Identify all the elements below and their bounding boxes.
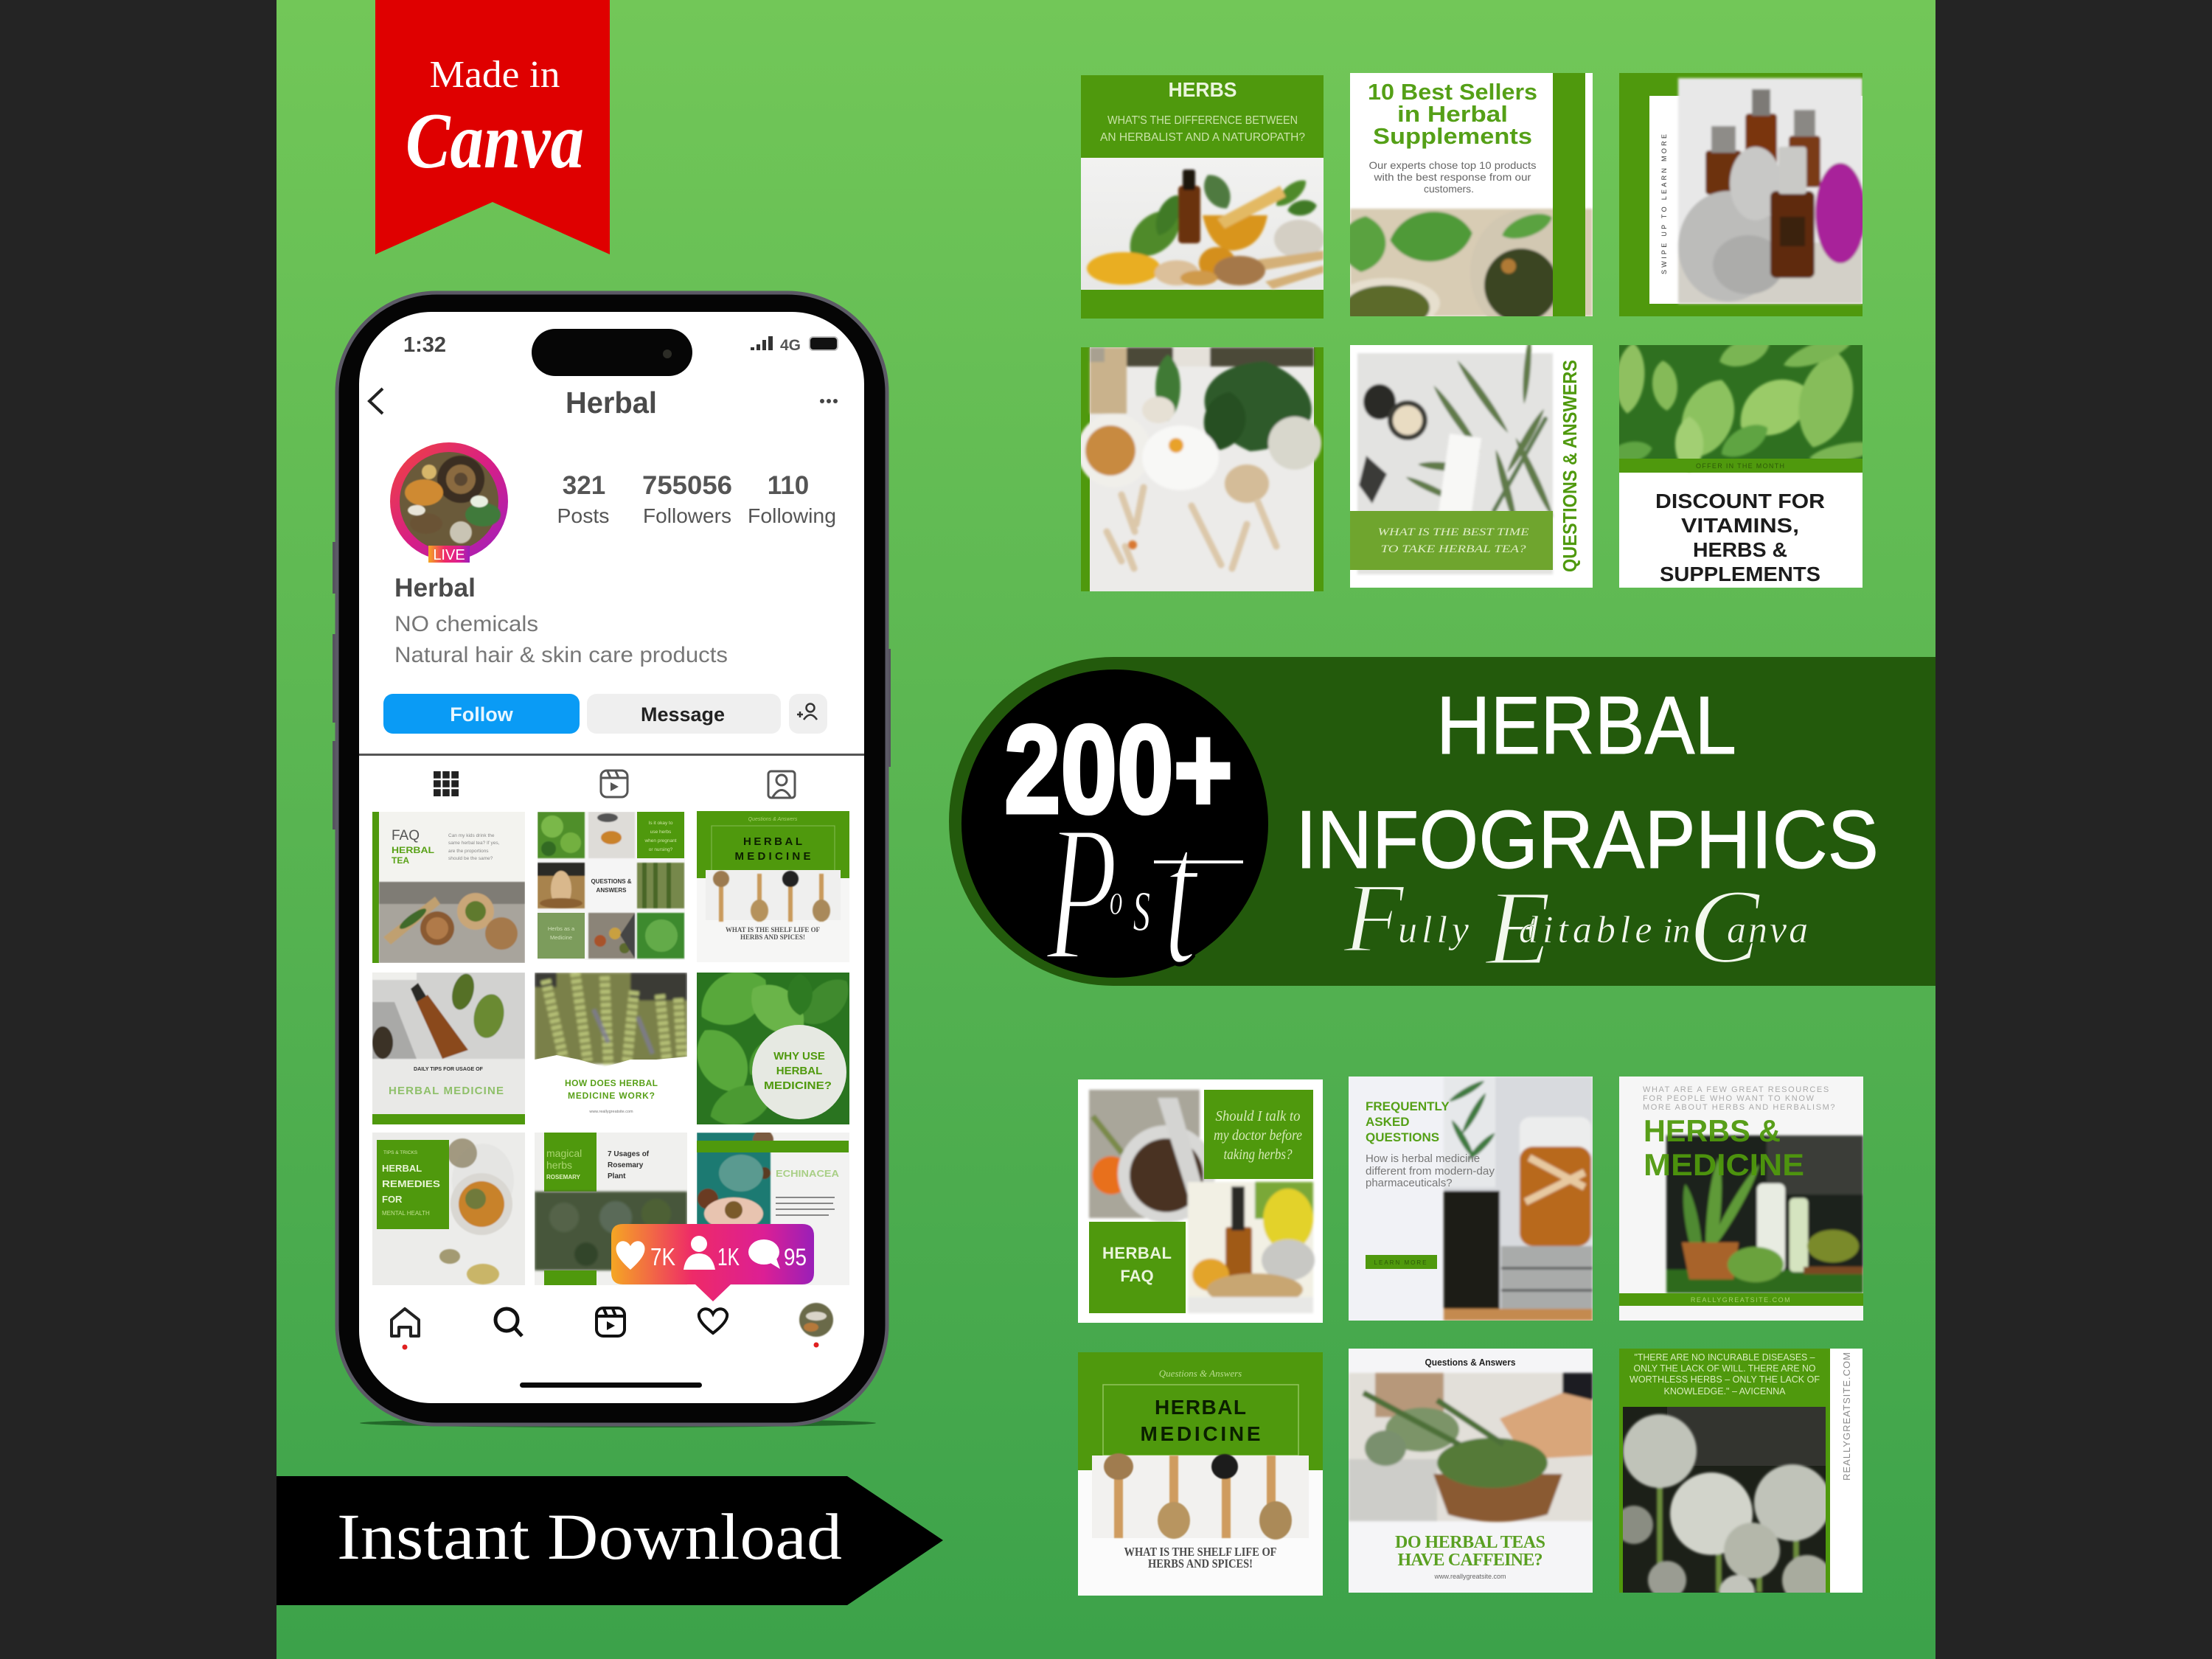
- tile: discount: OFFER IN THE MONTH: [1696, 462, 1784, 470]
- tile: frequently asked questions: ASKED: [1366, 1115, 1410, 1129]
- badge circle: [961, 669, 1268, 978]
- profile header: [369, 386, 838, 420]
- heading: HERBAL: [1436, 680, 1736, 771]
- tile: herbal teas caffeine: [1349, 1349, 1593, 1593]
- script subtitle: E: [1484, 869, 1551, 987]
- tile: 10 best sellers: with the best response from our: [1373, 171, 1531, 183]
- tile: frequently asked questions: LEARN MORE: [1374, 1259, 1427, 1266]
- tile: frequently asked questions: QUESTIONS: [1366, 1130, 1439, 1144]
- grid post: why use herbal medicine: MEDICINE?: [764, 1079, 832, 1092]
- tile: questions and answers: WHAT IS THE BEST TIME: [1377, 526, 1529, 538]
- grid post: rosemary: Rosemary: [608, 1161, 644, 1169]
- grid post: herbal remedies: [372, 1133, 525, 1285]
- tile: herbal faq: taking herbs?: [1224, 1147, 1292, 1163]
- tile: herbal faq: HERBAL: [1102, 1244, 1172, 1262]
- profile tab icons: [434, 771, 795, 798]
- ribbon: made in canva: Canva: [406, 97, 584, 185]
- tile: discount: VITAMINS,: [1681, 514, 1799, 537]
- profile stats: Posts: [557, 504, 609, 527]
- profile buttons: Follow: [450, 703, 514, 726]
- tile: frequently asked questions: pharmaceuticals?: [1366, 1177, 1453, 1189]
- tile: herbs and medicine: MEDICINE: [1644, 1147, 1804, 1182]
- grid post: rosemary: Plant: [608, 1172, 626, 1180]
- tile: 10 best sellers: [1350, 73, 1593, 316]
- tile: herbal faq: my doctor before: [1214, 1127, 1302, 1144]
- icon: reels: [597, 1308, 625, 1336]
- notification badge: 95: [784, 1244, 807, 1270]
- tile: frequently asked questions: How is herbal medicine: [1366, 1152, 1480, 1165]
- profile stats: [557, 471, 836, 527]
- tile: herbal medicine spoons: HERBAL: [1155, 1396, 1246, 1419]
- instant download arrow: [276, 1476, 943, 1605]
- grid post: how does herbal medicine work: www.reallygreatsite.com: [588, 1110, 633, 1114]
- grid post: herbal medicine spoons: WHAT IS THE SHELF LIFE OF: [726, 927, 820, 934]
- tile: herbal faq: [1078, 1079, 1323, 1323]
- tile: herbs and medicine: REALLYGREATSITE.COM: [1691, 1296, 1791, 1304]
- grid post: FAQ herbal tea: Can my kids drink the: [448, 833, 495, 838]
- tile: essential oil bottles: [1619, 73, 1863, 316]
- profile bio: Natural hair & skin care products: [394, 643, 728, 667]
- grid post: questions and answers collage: Herbs as a: [548, 925, 575, 932]
- profile stats: 110: [768, 471, 809, 500]
- grid post: questions and answers collage: QUESTIONS &: [591, 878, 632, 885]
- tile: herbs and medicine: WHAT ARE A FEW GREAT RESOURCES: [1643, 1085, 1830, 1094]
- tile: herbal medicine spoons: [1078, 1352, 1323, 1596]
- grid post: herbal medicine tips: HERBAL MEDICINE: [389, 1085, 504, 1097]
- tile: discount: SUPPLEMENTS: [1660, 563, 1820, 585]
- notification badge: 7K: [650, 1243, 675, 1270]
- tile: herbal medicine spoons: HERBS AND SPICES!: [1148, 1557, 1253, 1571]
- grid post: herbal medicine spoons: Questions & Answers: [748, 817, 798, 822]
- grid post: herbal medicine tips: DAILY TIPS FOR USAGE OF: [414, 1067, 484, 1072]
- tile: avicenna quote: KNOWLEDGE." – AVICENNA: [1663, 1385, 1786, 1397]
- grid post: rosemary: [535, 1133, 687, 1285]
- post script: [1046, 785, 1243, 1006]
- grid post: FAQ herbal tea: same herbal tea? If yes,: [448, 841, 500, 846]
- icon: home: [392, 1309, 419, 1336]
- profile bio: NO chemicals: [394, 612, 538, 636]
- phone body: [337, 293, 887, 1425]
- status bar: 4G: [780, 337, 801, 354]
- grid post: FAQ herbal tea: [372, 812, 525, 963]
- grid post: questions and answers collage: use herbs: [650, 830, 672, 835]
- tile: herbal faq: FAQ: [1120, 1267, 1154, 1285]
- grid post: FAQ herbal tea: should be the same?: [448, 856, 493, 861]
- tile: 10 best sellers: in Herbal: [1397, 101, 1508, 127]
- tile: herbal teas caffeine: Questions & Answers: [1425, 1357, 1516, 1368]
- grid post: questions and answers collage: Is it okay to: [649, 821, 673, 826]
- profile avatar: LIVE: [433, 547, 465, 563]
- grid post: herbal remedies: FOR: [382, 1194, 403, 1205]
- tile: herbal medicine spoons: MEDICINE: [1140, 1422, 1261, 1445]
- tile: herbs naturopath: WHAT'S THE DIFFERENCE BETWEEN: [1107, 114, 1298, 127]
- script subtitle: in: [1663, 911, 1690, 950]
- tile: herbs and medicine: MORE ABOUT HERBS AND HERBALISM?: [1643, 1103, 1836, 1112]
- grid post: why use herbal medicine: HERBAL: [776, 1065, 822, 1077]
- grid post: herbal medicine spoons: [697, 811, 849, 962]
- tile: discount: [1619, 345, 1863, 588]
- grid post: FAQ herbal tea: TEA: [392, 855, 409, 866]
- grid post: FAQ herbal tea: FAQ: [392, 828, 420, 844]
- tile: frequently asked questions: [1349, 1077, 1593, 1321]
- profile bio: [394, 574, 728, 667]
- post script: P: [1046, 785, 1118, 1001]
- tile: herbs and medicine: FOR PEOPLE WHO WANT TO KNOW: [1643, 1094, 1815, 1103]
- phone screen: [359, 312, 864, 1403]
- tile: questions and answers: QUESTIONS & ANSWERS: [1559, 360, 1581, 572]
- grid post: herbal medicine spoons: MEDICINE: [734, 850, 811, 863]
- grid post: herbal medicine spoons: HERBS AND SPICES!: [740, 934, 805, 942]
- banner: 200+ post herbal infographics: [949, 657, 1935, 1006]
- grid post: herbal remedies: REMEDIES: [382, 1178, 440, 1189]
- tile: 10 best sellers: Our experts chose top 10 products: [1368, 159, 1537, 171]
- tile: herbs and medicine: [1619, 1077, 1863, 1321]
- profile buttons: Message: [641, 703, 725, 726]
- tile: herbs naturopath: AN HERBALIST AND A NATUROPATH?: [1100, 131, 1305, 144]
- grid post: questions and answers collage: when pregnant: [644, 838, 677, 844]
- phone shadow: [360, 1419, 876, 1427]
- grid post: rosemary: 7 Usages of: [608, 1150, 650, 1158]
- tile: herbal medicine spoons: Questions & Answers: [1159, 1368, 1242, 1379]
- post script: s: [1133, 858, 1152, 948]
- tile: discount: HERBS &: [1693, 538, 1787, 561]
- tile: avicenna quote: REALLYGREATSITE.COM: [1841, 1352, 1852, 1481]
- grid post: rosemary: herbs: [546, 1159, 572, 1171]
- tile: herbal medicine spoons: WHAT IS THE SHELF LIFE OF: [1124, 1545, 1277, 1559]
- tile: 10 best sellers: Supplements: [1373, 123, 1532, 149]
- 200+: 200+: [1004, 700, 1233, 840]
- tile: marble flatlay: [1081, 347, 1324, 591]
- profile stats: 755056: [642, 471, 732, 500]
- tile: herbs naturopath: HERBS: [1168, 78, 1237, 101]
- notification dots: [403, 1342, 818, 1349]
- grid post: questions and answers collage: or nursing?: [649, 847, 673, 852]
- heading: INFOGRAPHICS: [1295, 794, 1879, 886]
- script subtitle: ully: [1398, 909, 1473, 951]
- tile: discount: DISCOUNT FOR: [1655, 490, 1825, 512]
- notification badge: [611, 1224, 814, 1301]
- grid post: herbal medicine spoons: HERBAL: [743, 835, 802, 848]
- phone side buttons: [333, 542, 891, 830]
- icon: heart: [699, 1309, 727, 1333]
- profile buttons: [383, 694, 827, 734]
- tile: herbal teas caffeine: DO HERBAL TEAS: [1395, 1533, 1545, 1552]
- icon: profile thumbnail: [799, 1303, 833, 1337]
- tile: avicenna quote: [1619, 1349, 1863, 1593]
- tile: herbal teas caffeine: www.reallygreatsite.com: [1433, 1573, 1506, 1580]
- script subtitle: anva: [1727, 909, 1810, 951]
- grid post: echinacea: ECHINACEA: [776, 1168, 840, 1179]
- grid post: herbal medicine tips: [372, 973, 525, 1124]
- grid post: questions and answers collage: Medicine: [550, 934, 572, 941]
- profile stats: Followers: [643, 504, 731, 527]
- tile: 10 best sellers: customers.: [1424, 183, 1474, 195]
- tile: herbs naturopath: [1081, 75, 1324, 319]
- grid post: FAQ herbal tea: HERBAL: [392, 845, 434, 855]
- tile: herbal faq: Should I talk to: [1215, 1108, 1301, 1124]
- tile: herbal teas caffeine: HAVE CAFFEINE?: [1398, 1551, 1543, 1570]
- grid post: how does herbal medicine work: MEDICINE WORK?: [568, 1091, 655, 1101]
- ribbon: made in canva: [375, 0, 610, 254]
- tile: avicenna quote: "THERE ARE NO INCURABLE DISEASES –: [1634, 1352, 1815, 1363]
- tile: essential oil bottles: SWIPE UP TO LEARN MORE: [1660, 134, 1668, 274]
- script subtitle: ditable: [1519, 909, 1656, 951]
- tile: frequently asked questions: FREQUENTLY: [1366, 1099, 1450, 1113]
- ribbon: made in canva: Made in: [429, 54, 560, 96]
- tile: questions and answers: [1350, 345, 1593, 588]
- post script: t: [1164, 786, 1200, 1006]
- tile: 10 best sellers: 10 Best Sellers: [1368, 79, 1537, 105]
- tile: questions and answers: TO TAKE HERBAL TEA?: [1380, 543, 1526, 555]
- heading: [1295, 680, 1879, 886]
- profile avatar: [390, 442, 508, 563]
- status bar: [403, 329, 838, 376]
- icon: search: [495, 1309, 522, 1336]
- grid post: questions and answers collage: [538, 812, 685, 960]
- post script: o: [1110, 875, 1123, 924]
- profile stats: Following: [748, 504, 836, 527]
- script subtitle: F: [1343, 863, 1405, 973]
- bottom navigation: [392, 1303, 833, 1388]
- tile: avicenna quote: ONLY THE LACK OF WILL. THERE ARE NO: [1634, 1363, 1815, 1374]
- grid post: herbal remedies: MENTAL HEALTH: [382, 1210, 430, 1217]
- status bar: 1:32: [403, 333, 446, 357]
- grid post: why use herbal medicine: [697, 973, 849, 1124]
- notification badge: 1K: [717, 1243, 740, 1270]
- grid post: how does herbal medicine work: HOW DOES HERBAL: [565, 1078, 658, 1088]
- script subtitle: C: [1688, 868, 1761, 986]
- grid post: why use herbal medicine: WHY USE: [773, 1050, 825, 1062]
- grid post: herbal remedies: HERBAL: [382, 1163, 422, 1174]
- phone mockup: [333, 293, 891, 1427]
- profile header: Herbal: [566, 386, 657, 420]
- instant download arrow: Instant Download: [337, 1501, 842, 1573]
- tile: avicenna quote: WORTHLESS HERBS – ONLY THE LACK OF: [1630, 1374, 1820, 1385]
- grid post: rosemary: magical: [546, 1147, 582, 1159]
- tile: frequently asked questions: different from modern-day: [1366, 1165, 1495, 1178]
- grid post: echinacea: [697, 1133, 849, 1285]
- grid post: rosemary: ROSEMARY: [546, 1174, 581, 1180]
- profile stats: 321: [563, 471, 605, 500]
- tile: herbs and medicine: HERBS &: [1644, 1113, 1781, 1148]
- grid post: herbal remedies: TIPS & TRICKS: [383, 1150, 418, 1155]
- grid post: how does herbal medicine work: [535, 973, 687, 1114]
- grid post: questions and answers collage: ANSWERS: [597, 887, 627, 894]
- home indicator: [520, 1382, 702, 1388]
- grid post: FAQ herbal tea: are the proportions: [448, 849, 489, 854]
- profile bio: Herbal: [394, 574, 476, 602]
